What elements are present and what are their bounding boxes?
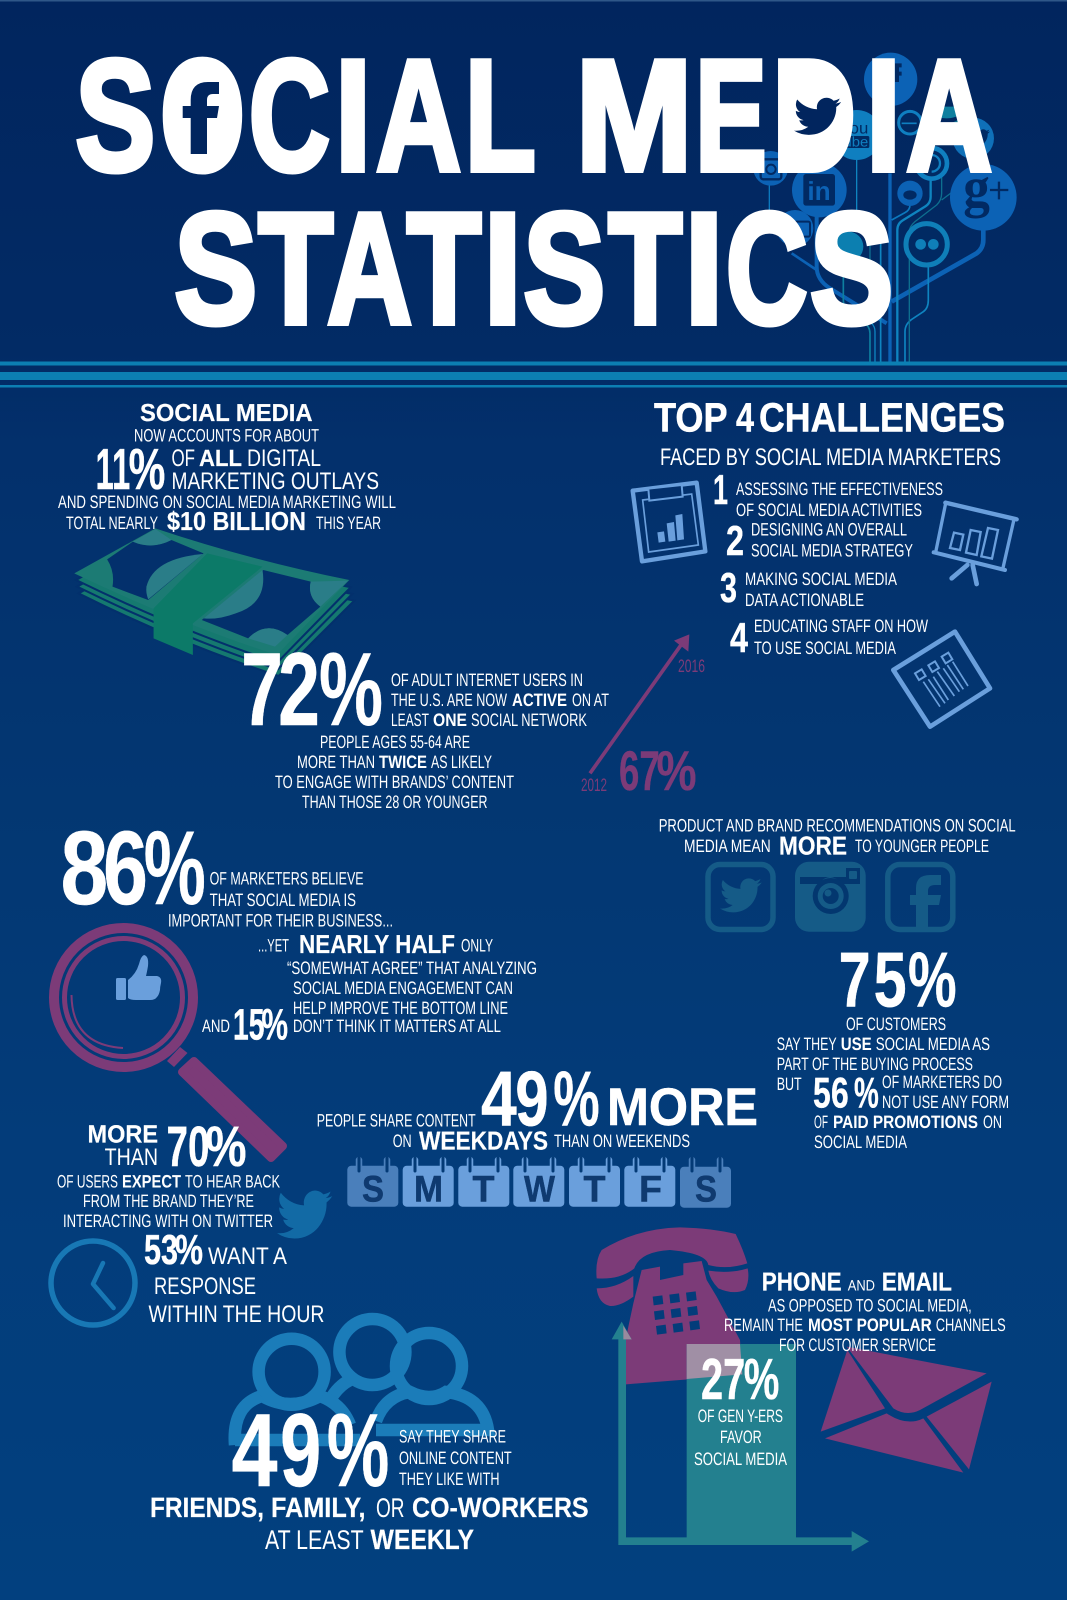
icon: week calendars: W (524, 1169, 555, 1210)
heading: friends, family, co-workers: FRIENDS, (150, 1492, 264, 1523)
text block: OF MARKETERS BELIEVE (210, 869, 364, 889)
icon: telephone (596, 1227, 748, 1384)
text block (777, 1014, 990, 1094)
text block: gen y: FAVOR (720, 1427, 762, 1447)
title (76, 28, 992, 357)
heading: friends, family, co-workers (150, 1492, 589, 1555)
text block: ages 55-64: TO ENGAGE WITH BRANDS’ CONTENT (275, 772, 514, 792)
panel: phone and email (694, 1267, 1006, 1469)
heading: more than (88, 1120, 158, 1171)
text block: spending: THIS YEAR (316, 513, 381, 533)
stat: 49%: 4 (481, 1055, 517, 1143)
text block (399, 1426, 512, 1489)
heading: CHALLENGES (759, 394, 1005, 440)
challenge 1 (713, 466, 943, 520)
text block: spending: TOTAL NEARLY (66, 513, 158, 533)
text block: FROM THE BRAND THEY’RE (83, 1191, 254, 1211)
challenge 3 (720, 564, 897, 611)
heading: friends, family, co-workers: OR (376, 1493, 404, 1523)
challenge 2: DESIGNING AN OVERALL (751, 520, 907, 540)
title: S (810, 181, 893, 357)
heading: EMAIL (882, 1267, 952, 1297)
challenge 4 (730, 614, 928, 661)
icon: week calendars: F (639, 1169, 662, 1210)
icon: week calendars (347, 1158, 731, 1210)
icon: social media network tree: Tube (835, 134, 868, 150)
bar chart (612, 1322, 869, 1552)
icon: twitter bird (277, 1191, 332, 1239)
icon: twitter bird in D (785, 70, 849, 165)
panel: users expect response on twitter (51, 1115, 332, 1328)
text block: nearly half: ...YET (258, 936, 289, 956)
icon: clipboard chart (633, 483, 705, 561)
text block: IMPORTANT FOR THEIR BUSINESS... (168, 911, 393, 931)
stat: 86%: % (144, 810, 206, 927)
stat: 49%: 9 (515, 1055, 549, 1143)
text block: weekdays: WEEKDAYS (419, 1126, 548, 1156)
stat: 15%: % (262, 1000, 288, 1050)
stat: 49%: 4 (232, 1393, 278, 1509)
title: L (465, 28, 534, 204)
text block: PART OF THE BUYING PROCESS (777, 1054, 973, 1074)
heading: more: MORE (607, 1078, 758, 1137)
heading: friends, family, co-workers: WEEKLY (370, 1524, 474, 1555)
text block: within the hour (148, 1243, 324, 1328)
text block: of all digital (172, 445, 379, 495)
text block: marketers: NOT USE ANY FORM (882, 1092, 1009, 1112)
text block: ages 55-64: TWICE (379, 752, 427, 772)
text block (168, 869, 393, 931)
text block: of all digital: OF (172, 445, 195, 472)
challenge 1: ASSESSING THE EFFECTIVENESS (736, 479, 943, 499)
title: I (335, 28, 371, 204)
text block: of all digital: DIGITAL (247, 445, 321, 472)
challenge 1: 1 (713, 466, 728, 513)
heading: friends, family, co-workers: CO-WORKERS (412, 1492, 589, 1523)
text block: adult internet users: ACTIVE (512, 690, 567, 710)
text block: SAY THEY (777, 1034, 837, 1054)
stat: 49%: % (553, 1055, 600, 1143)
text block: ages 55-64: MORE THAN (297, 752, 375, 772)
heading: PHONE (762, 1267, 842, 1297)
text block: BUT (777, 1074, 802, 1094)
text block: TO YOUNGER PEOPLE (855, 836, 989, 856)
challenge 4: EDUCATING STAFF ON HOW (754, 616, 928, 636)
challenge 2 (726, 517, 913, 564)
text block: spending: AND SPENDING ON SOCIAL MEDIA MARKETING WILL (58, 492, 396, 512)
heading: AND (848, 1278, 875, 1295)
text block: of all digital: MARKETING OUTLAYS (172, 468, 379, 495)
stat: 11%: % (129, 437, 165, 502)
icon: clock (51, 1241, 135, 1325)
stat: 70%: % (206, 1115, 246, 1179)
text block: ONLINE CONTENT (399, 1448, 512, 1468)
stat: 56%: % (854, 1070, 879, 1118)
stat: 75%: % (908, 936, 957, 1024)
title: I (684, 181, 724, 357)
icon: week calendars: S (362, 1169, 384, 1210)
icon: presentation board (934, 503, 1017, 584)
panel: 75% customers (777, 936, 1009, 1152)
text block: THAT SOCIAL MEDIA IS (210, 890, 356, 910)
text block: spending (58, 492, 396, 536)
text block: MOST POPULAR (808, 1315, 932, 1335)
label: 2012: 2012 (581, 775, 607, 795)
text block: nearly half: HELP IMPROVE THE BOTTOM LINE (293, 998, 508, 1018)
text block: ages 55-64 (275, 732, 514, 812)
icon: week calendars: T (584, 1169, 606, 1210)
text block: OF CUSTOMERS (846, 1014, 946, 1034)
icon: rotated document grid (893, 632, 990, 727)
icon: thumbs up (116, 955, 161, 1000)
panel: younger people recommendations (659, 816, 1016, 932)
text block: gen y: SOCIAL MEDIA (694, 1449, 787, 1469)
text block: of all digital: ALL (199, 445, 242, 471)
title: C (249, 28, 330, 204)
icon: envelope (821, 1347, 992, 1473)
title: T (608, 181, 682, 357)
text block (659, 816, 1016, 860)
panel: 49% share content weekly (150, 1393, 589, 1555)
title: M (576, 28, 693, 204)
stat: 72%: % (319, 632, 383, 748)
text block: SAY THEY SHARE (399, 1426, 506, 1446)
text block: marketers (814, 1072, 1009, 1152)
panel: social media spending (58, 400, 396, 536)
icon: social media network tree: g (963, 156, 990, 219)
stat: 11%: 11 (96, 437, 130, 502)
stat: 27%: % (744, 1347, 779, 1412)
heading: TOP (654, 394, 727, 440)
challenge 4: TO USE SOCIAL MEDIA (754, 638, 896, 658)
stat: 27%: 27 (701, 1347, 745, 1412)
text block: ages 55-64: AS LIKELY (431, 752, 492, 772)
arrow (590, 634, 689, 773)
heading: SOCIAL MEDIA (140, 400, 313, 427)
icon: week calendars: T (472, 1169, 495, 1210)
challenge 3: DATA ACTIONABLE (745, 590, 864, 610)
panel: 86% marketers (60, 810, 537, 1050)
stat: 72%: 2 (278, 632, 320, 748)
text block: ages 55-64: PEOPLE AGES 55-64 ARE (320, 732, 470, 752)
icon: facebook box (888, 864, 953, 930)
heading: more than: THAN (105, 1144, 158, 1171)
title: D (772, 28, 856, 204)
text block: ages 55-64: THAN THOSE 28 OR YOUNGER (302, 792, 488, 812)
text block: nearly half (202, 929, 537, 1036)
heading: friends, family, co-workers: FAMILY, (271, 1492, 366, 1523)
stat: 53%: 53 (144, 1226, 178, 1273)
text block (57, 1172, 280, 1231)
text block: OF USERS (57, 1172, 118, 1192)
text block: THEY LIKE WITH (399, 1469, 500, 1489)
heading (762, 1267, 952, 1297)
icon: stack of money (74, 528, 354, 676)
stat: 56%: 6 (831, 1070, 849, 1118)
heading: friends, family, co-workers: AT LEAST (265, 1525, 364, 1555)
text block: marketers: ON (983, 1112, 1002, 1132)
text block: gen y (694, 1406, 787, 1469)
text block: adult internet users: THE U.S. ARE NOW (391, 690, 507, 710)
title: E (695, 28, 767, 204)
text block: nearly half: “SOMEWHAT AGREE” THAT ANALYZING (287, 958, 537, 978)
challenge 4: 4 (730, 614, 748, 661)
text block: within the hour: RESPONSE (154, 1273, 256, 1300)
stat: 86%: 6 (103, 810, 148, 927)
title: A (376, 28, 461, 204)
panel: 72% active adults (241, 632, 609, 812)
icon: social media network tree: in (807, 176, 831, 206)
text block: adult internet users: OF ADULT INTERNET USERS IN (391, 670, 583, 690)
title: S (174, 181, 257, 357)
text block: adult internet users: LEAST (391, 710, 429, 730)
text block: marketers: OF MARKETERS DO (882, 1072, 1002, 1092)
text block: REMAIN THE (724, 1315, 803, 1335)
text block: NOW ACCOUNTS FOR ABOUT (134, 426, 319, 446)
text block: weekdays (393, 1126, 690, 1156)
text block: USE (841, 1034, 872, 1054)
challenge 2: 2 (726, 517, 744, 564)
title: T (407, 181, 481, 357)
stat: 56%: 5 (813, 1070, 831, 1118)
text block: FOR CUSTOMER SERVICE (779, 1335, 936, 1355)
challenge 3: MAKING SOCIAL MEDIA (745, 569, 897, 589)
heading: more than: MORE (88, 1120, 158, 1148)
text block: PEOPLE SHARE CONTENT (317, 1111, 476, 1131)
text block: CHANNELS (936, 1315, 1006, 1335)
icon: social media network tree (753, 53, 1017, 362)
icon: twitter box (708, 864, 773, 930)
challenge 1: OF SOCIAL MEDIA ACTIVITIES (736, 500, 922, 520)
stat: 15%: 15 (233, 1000, 264, 1050)
stat: 70%: 70 (166, 1115, 210, 1179)
text block (724, 1296, 1006, 1355)
title: T (258, 181, 333, 357)
text block: weekdays: THAN ON WEEKENDS (554, 1131, 690, 1151)
text block: nearly half: NEARLY HALF (299, 929, 455, 959)
title: I (484, 181, 522, 357)
text block: within the hour: WANT A (208, 1243, 287, 1270)
title: S (76, 28, 155, 204)
icon: week calendars: M (414, 1169, 443, 1210)
icon: magnifying glass (54, 928, 283, 1158)
challenge 3: 3 (720, 564, 737, 611)
label: 2016: 2016 (678, 656, 705, 676)
text block: adult internet users: ON AT (572, 690, 609, 710)
title: O (160, 28, 245, 204)
text block: nearly half: DON’T THINK IT MATTERS AT ALL (293, 1016, 501, 1036)
text block: within the hour: WITHIN THE HOUR (148, 1301, 324, 1328)
text block: adult internet users (391, 670, 609, 730)
text block: TO HEAR BACK (185, 1172, 280, 1192)
text block: weekdays: ON (393, 1131, 412, 1151)
title: A (906, 28, 992, 204)
text block: adult internet users: ONE (433, 710, 467, 730)
title: A (327, 181, 412, 357)
text block: INTERACTING WITH ON TWITTER (63, 1211, 273, 1231)
panel: top 4 challenges (633, 394, 1017, 727)
panel: 67% arrow chart (581, 634, 705, 802)
text block: marketers: PAID PROMOTIONS (833, 1112, 978, 1132)
stat: 67%: % (656, 739, 696, 802)
icon: week calendars: S (695, 1169, 717, 1210)
stat: 49%: % (327, 1393, 389, 1509)
text block: EXPECT (122, 1172, 181, 1192)
icon: instagram box (795, 862, 866, 932)
text block: nearly half: AND (202, 1016, 230, 1036)
text block: spending: $10 BILLION (167, 506, 306, 536)
stat: 72%: 7 (241, 632, 283, 748)
text block: nearly half: SOCIAL MEDIA ENGAGEMENT CAN (293, 978, 513, 998)
title: S (523, 181, 605, 357)
text block: gen y: OF GEN Y-ERS (698, 1406, 783, 1426)
title: C (726, 181, 808, 357)
text block: marketers: SOCIAL MEDIA (814, 1132, 907, 1152)
icon: facebook f in O (176, 69, 228, 161)
stat: 75%: 5 (874, 936, 907, 1024)
text block: marketers: OF (814, 1112, 828, 1132)
text block: MEDIA MEAN (684, 836, 771, 856)
panel: 49% more on weekdays (317, 1055, 758, 1210)
stat: 49%: 9 (280, 1393, 321, 1509)
icon: social media network tree: You (840, 119, 868, 137)
stat: 53%: % (175, 1226, 203, 1273)
stat: 67%: 67 (619, 739, 660, 802)
stat: 75%: 7 (839, 936, 871, 1024)
challenge 2: SOCIAL MEDIA STRATEGY (751, 540, 913, 560)
text block: AS OPPOSED TO SOCIAL MEDIA, (768, 1296, 972, 1316)
heading: 4 (736, 394, 754, 440)
icon: group of people (235, 1319, 488, 1445)
title: I (866, 28, 901, 204)
text block: MORE (779, 830, 847, 860)
stat: 86%: 8 (60, 810, 108, 927)
text block: nearly half: ONLY (461, 936, 493, 956)
text block: adult internet users: SOCIAL NETWORK (471, 710, 587, 730)
text block: SOCIAL MEDIA AS (876, 1034, 990, 1054)
